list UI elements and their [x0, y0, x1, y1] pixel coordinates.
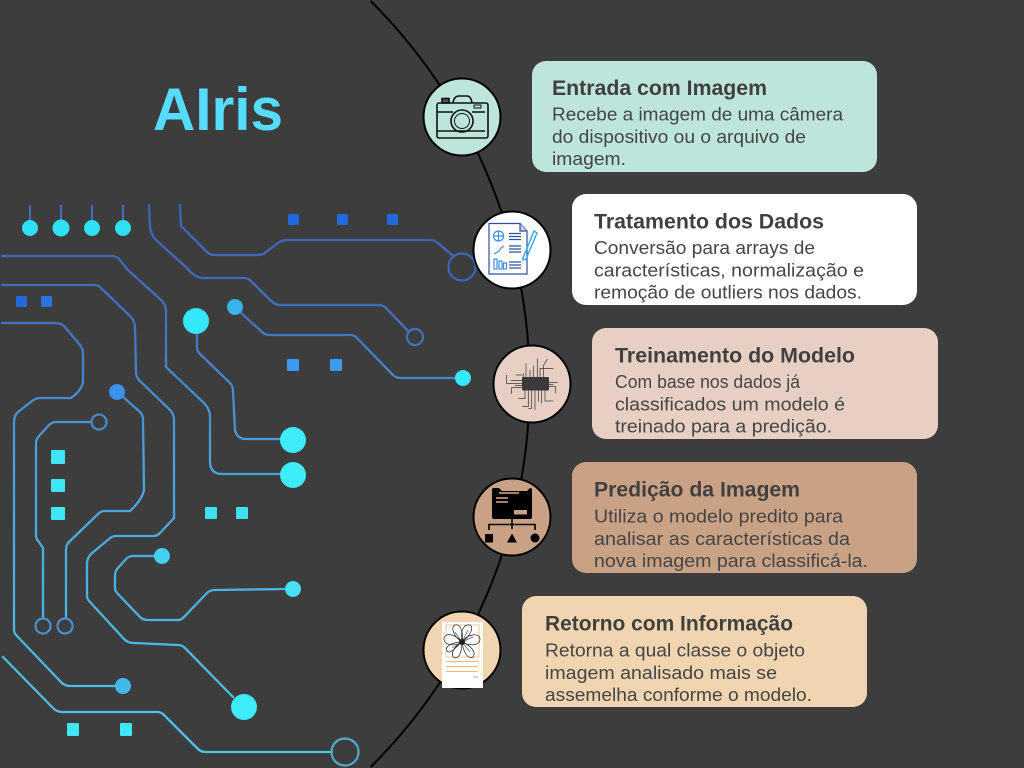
card 4: Predição da Imagem: analisar as características da — [594, 529, 851, 549]
card 4: Predição da Imagem: Utiliza o modelo predito para — [594, 506, 844, 526]
square pads — [16, 214, 398, 736]
timeline arc — [371, 1, 530, 767]
card 3: Treinamento do Modelo — [592, 328, 938, 439]
card 4: Predição da Imagem — [572, 462, 917, 573]
icon: microchip — [494, 346, 570, 422]
card 3: Treinamento do Modelo: Com base nos dados já — [615, 372, 801, 392]
icon: flower page — [424, 612, 500, 688]
icon: camera — [424, 78, 500, 156]
card 2: Tratamento dos Dados: características, normalização e — [594, 260, 864, 280]
card 5: Retorno com Informação: imagem analisado mais se — [545, 663, 777, 683]
traces — [2, 205, 455, 752]
icon: classification folder — [474, 478, 550, 556]
card 5: Retorno com Informação — [522, 596, 867, 707]
card 1: Entrada com Imagem: imagem. — [552, 149, 626, 169]
ring nodes — [36, 254, 476, 766]
card 1: Entrada com Imagem: Recebe a imagem de uma câmera — [552, 104, 844, 124]
circuit board illustration — [2, 205, 476, 766]
card 1: Entrada com Imagem — [532, 61, 877, 172]
card 2: Tratamento dos Dados: Tratamento dos Dados — [594, 210, 824, 234]
icon: data report — [474, 212, 550, 288]
title: AIris — [153, 76, 283, 143]
card 3: Treinamento do Modelo: classificados um modelo é — [615, 394, 845, 414]
card 5: Retorno com Informação: assemelha conforme o modelo. — [545, 685, 812, 705]
dot nodes — [22, 220, 471, 720]
card 5: Retorno com Informação: Retorno com Informação — [545, 612, 793, 636]
card 2: Tratamento dos Dados — [572, 194, 917, 305]
card 3: Treinamento do Modelo: Treinamento do Modelo — [615, 344, 855, 368]
card 5: Retorno com Informação: Retorna a qual classe o objeto — [545, 640, 805, 660]
card 2: Tratamento dos Dados: remoção de outliers nos dados. — [594, 282, 862, 302]
card 1: Entrada com Imagem: Entrada com Imagem — [552, 77, 767, 100]
card 4: Predição da Imagem: nova imagem para classificá-la. — [594, 551, 868, 571]
card 4: Predição da Imagem: Predição da Imagem — [594, 478, 800, 502]
card 1: Entrada com Imagem: do dispositivo ou o arquivo de — [552, 127, 806, 147]
card 2: Tratamento dos Dados: Conversão para arrays de — [594, 238, 815, 258]
card 3: Treinamento do Modelo: treinado para a predição. — [615, 416, 832, 436]
